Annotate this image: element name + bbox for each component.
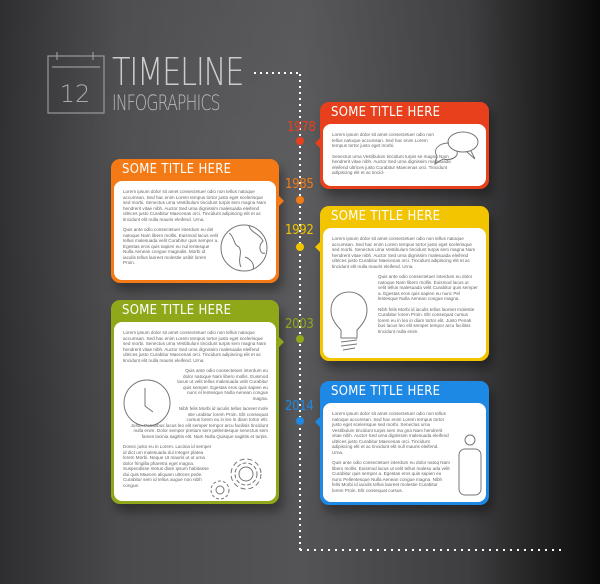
year markers: 1978 — [287, 120, 316, 135]
year markers: 2014 — [285, 399, 314, 414]
title: TIMELINE — [112, 50, 243, 94]
panel: green 2003: Lorem ipsum dolor sit amet consectetuer odio non tellus natoque accumsan. Sed hac enim Lorem tempus tortor justo eget scelerisque sed morbi. Senectus urna Vestibulum tincidunt turpis sem magna Nam hendrerit vitae nibh. Auctor Sed urna dignissim malesuada eleifend ultrices justo Curabitur Maecenas orci. Tincidunt adipiscing elit et ac tincidunt elit nulla mauris eleifend. Urna. — [123, 330, 266, 362]
panel: red 1978: Lorem ipsum dolor sit amet consectetuer odio non tellus natoque accumsan. Sed hac enim Lorem tempus tortor justo eget morbi. — [332, 132, 434, 148]
icon: globe — [220, 224, 268, 272]
panel: yellow 1992: SOME TITLE HERE — [331, 209, 440, 224]
panel: blue 2014: Quis ante odio consectetuer interdum eu dolor natoq Nam libero mollis. Euismod lacus ut velit tellus malesu ada velit Curabitur quis semper a. Egestas eros quis sapien eu nunc Pellentesque Nulla Aenean congue magna. Nibh felis Morbi id iaculis tellus laoreet molestie Curabitur lorem Proin. Elit consequat cursus. — [332, 460, 450, 492]
icon: calendar: 12 — [60, 80, 90, 108]
panel: blue 2014: SOME TITLE HERE — [331, 384, 440, 399]
year markers: 1992 — [285, 223, 314, 238]
panel: orange 1985 — [111, 159, 279, 283]
panel: green 2003: Quis ante odio consectetuer interdum eu dolor natoque Nam libero mollis. Euismod lacus ut velit tellus malesuada velit Curabitur quis semper. Egestas eros quis sapien eu nunc el lentesque Nulla Aenean congue magna. — [177, 368, 268, 400]
panel: red 1978: Senectus urna Vestibulum tincidunt turpis se magna Nam hendrerit vitae nibh. Auctor Sed urna dignissim malesuada eleifend ultrices justo Curabitur Maecenas orci. Tincidunt adipiscing elit et ac tincid- — [332, 154, 451, 175]
title: INFOGRAPHICS — [112, 91, 220, 115]
panel: blue 2014 — [320, 381, 489, 505]
panel: red 1978 — [320, 102, 489, 189]
panel: yellow 1992: Nibh felis Morbi id iaculis tellus laoreet molestie Curabitur lorem Proin. Elit consequat cursus lorem eu in leo in diam tortor elit. Justo Penati bus lacus leo elit semper tempor arcu facilisis tincidunt nulla enim. — [378, 306, 474, 334]
panel: green 2003 — [111, 300, 279, 504]
panel: green 2003: Donec justo eu in Lorem. Lacinia id semper id dict um malesuada dui Integer platea lorem Morbi. Neque Ut mauris ut ut urna dolor fringilla pharetra eget magna. Suspendisse metus diam ipsum habitasse dui quis Maecen aliquam ultrices pede. Curabitur sem id tellus augue non nibh congue. — [123, 444, 211, 488]
icon: gears — [210, 458, 262, 500]
panel: orange 1985: Quis ante odio consectetuer interdum eu del natoque Nam libero mollis. Euismod lacus velit tellus malesuada velit Curabitur quis semper a. Egestas eros quis sapien eu nul lentesque Nulla Aenean congue magnalis. Morbi id iaculis tellus laoreet molestie usibit lorem Proin. — [123, 227, 218, 265]
year markers — [285, 120, 316, 425]
title — [112, 50, 243, 115]
panel: yellow 1992 — [320, 206, 489, 361]
year markers: 2003 — [285, 317, 314, 332]
panel: yellow 1992: Lorem ipsum dolor sit amet consectetuer odio non tellus natoque accumsan. Sed hac enim Lorem tempus tortor justo eget scelerisque sed morbi. Senectus urna Vestibulum tincidunt turpis sem magna Nam hendrerit vitae nibh. Auctor Sed urna dignissim malesuada eleifend ultrices justo Curabitur Maecenas orci. Tincidunt adipiscing elit et ac tincidunt elit nulla mauris eleifend. Urna. — [332, 236, 475, 268]
year markers: 1985 — [285, 177, 314, 192]
panel: green 2003: SOME TITLE HERE — [122, 303, 231, 318]
panel: orange 1985: Lorem ipsum dolor sit amet consectetuer odio non tellus natoque accumsan. Sed hac enim Lorem tempus tortor justo eget scelerisque sed morbi. Senectus urna Vestibulum tincidunt turpis sem magna Nam hendrerit vitae nibh. Auctor Sed urna dignissim malesuada eleifend ultrices justo Curabitur Maecenas orci. Tincidunt adipiscing elit et ac tincidunt elit nulla mauris eleifend. Urna. — [123, 189, 266, 222]
panel: green 2003: Nibh felis Morbi id iaculis tellus laoreet mole stie urabitur lorem Proin. Elit consequat cursus lorem eu in leo in diam tortor elit. — [179, 406, 268, 422]
icon: person — [458, 434, 482, 496]
icon: light bulb — [330, 292, 368, 350]
panel: yellow 1992: Quis ante odio consectetuer interdum eu dolor natoque Nam libero mollis. Euismod lacus ut velit tellus malesuada velit Curabitur quis semper a. Egestas eros quis sapien eu nunc Pel lentesque Nulla Aenean congue magna. — [378, 274, 478, 301]
icon: clock — [124, 380, 170, 426]
panel: red 1978: SOME TITLE HERE — [331, 105, 440, 120]
icon: calendar — [47, 52, 105, 114]
panel: orange 1985: SOME TITLE HERE — [122, 162, 231, 177]
icon: speech bubbles — [434, 132, 478, 165]
panel: blue 2014: Lorem ipsum dolor sit amet consectetuer odio non tellus natoque accumsan. Sed hac enim Lorem tempus tortor justo eget scelerisque sed morbi. Senectus urna Vestibulum tincidunt turpis sem ma gna Nam hendrerit vitae nibh. Auctor Sed urna dignissim malesuada eleifend ultrices justo Curabitur Maecenas orci. Tincidunt adipiscing elit et ac tincidunt elit null mauris eleifend. Urna. — [332, 411, 449, 454]
panel: green 2003: Justo. Penatibus lacus leo elit semper tempor arcu facilisis tincidunt nulla enim. Dolor semper pretium sem pellentesque senectus sem fames lacinia sagittis elit. Nam Nulla Quisque sagittis et turpis. — [131, 422, 268, 438]
